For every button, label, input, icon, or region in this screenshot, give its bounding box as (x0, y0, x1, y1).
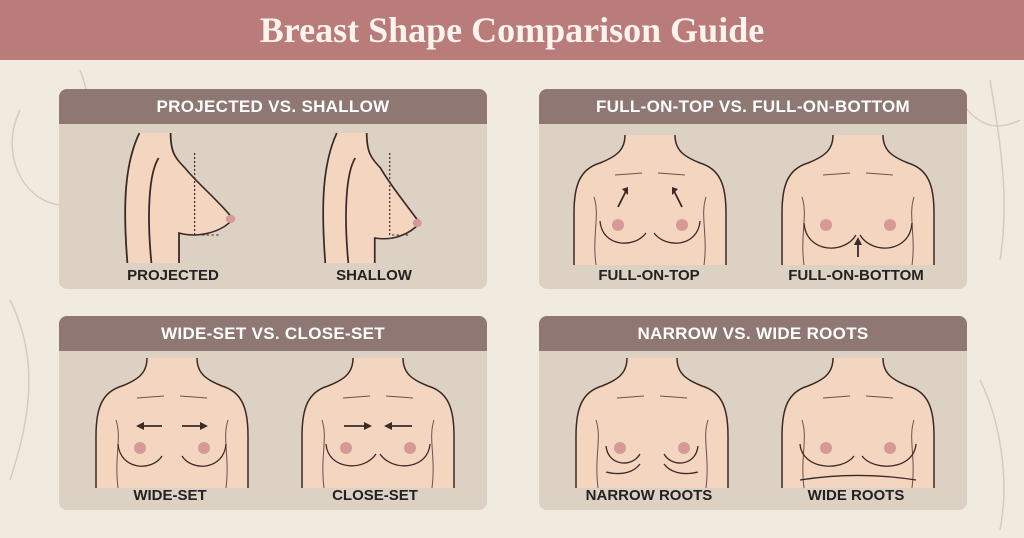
label: narrow roots: NARROW ROOTS (586, 487, 712, 504)
panel: wide-set vs close-set (59, 316, 487, 510)
title: Breast Shape Comparison Guide (260, 10, 764, 50)
panel: full-on-top vs full-on-bottom (539, 89, 967, 289)
panel: narrow vs wide roots (539, 316, 967, 510)
label: close-set: CLOSE-SET (332, 487, 418, 504)
label: full-on-bottom: FULL-ON-BOTTOM (788, 267, 924, 284)
label: wide roots: WIDE ROOTS (808, 487, 904, 504)
panel: full-on-top vs full-on-bottom: FULL-ON-TOP VS. FULL-ON-BOTTOM (596, 97, 910, 116)
icon: close-set torso (302, 358, 454, 488)
label: wide-set: WIDE-SET (133, 487, 207, 504)
icon: full-on-top torso (574, 135, 726, 265)
label: projected: PROJECTED (127, 267, 219, 284)
icon: shallow profile (323, 133, 422, 263)
icon: wide-set torso (96, 358, 248, 488)
icon: projected profile (125, 133, 235, 263)
panel: narrow vs wide roots: NARROW VS. WIDE ROOTS (637, 324, 869, 343)
title (0, 0, 1024, 60)
icon: wide roots torso (782, 358, 934, 488)
panel: wide-set vs close-set: WIDE-SET VS. CLOSE-SET (161, 324, 385, 343)
icon: narrow roots torso (576, 358, 728, 488)
panel: projected vs shallow (59, 89, 487, 289)
label: shallow: SHALLOW (336, 267, 412, 284)
label: full-on-top: FULL-ON-TOP (598, 267, 700, 284)
panel: projected vs shallow: PROJECTED VS. SHALLOW (156, 97, 390, 116)
icon: full-on-bottom torso (782, 135, 934, 265)
